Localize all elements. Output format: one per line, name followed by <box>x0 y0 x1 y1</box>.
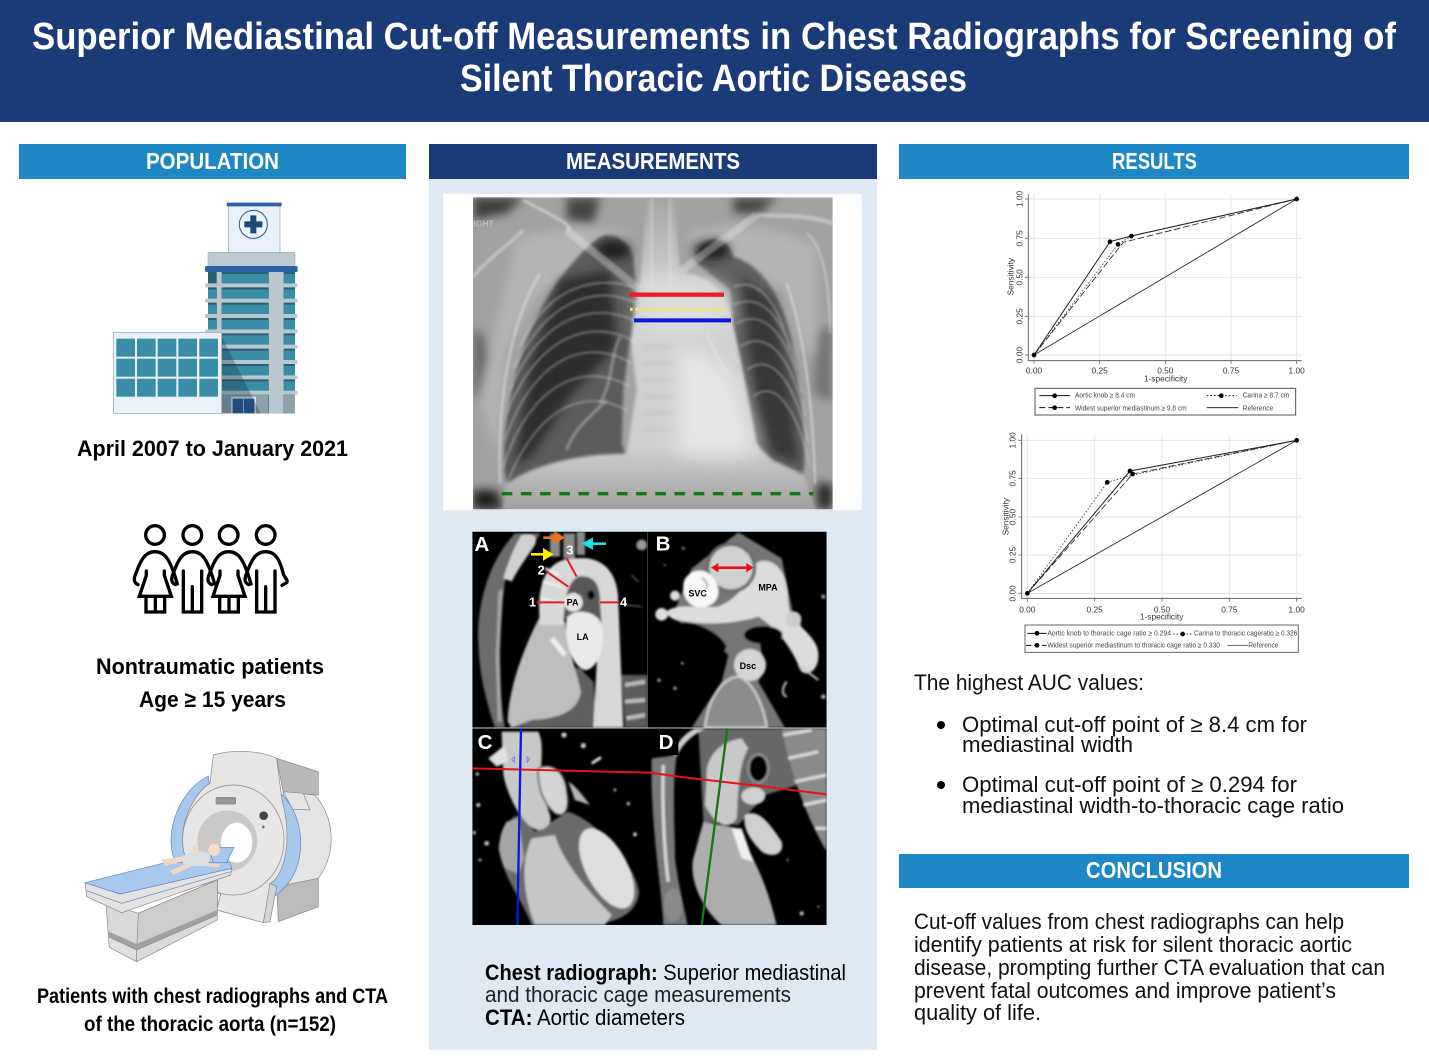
legend: Aortic knob ≥ 8.4 cm <box>1075 393 1135 400</box>
text: conclusion body: disease, prompting further CTA evaluation that can <box>914 955 1385 980</box>
panel A: 1 <box>529 596 536 610</box>
panel B: MPA <box>758 583 778 593</box>
text: conclusion body: quality of life. <box>914 1000 1041 1025</box>
legend <box>1025 625 1298 652</box>
chart: ROC curves for absolute measurements: 1.00 <box>1289 366 1305 376</box>
panel: population <box>19 144 406 1036</box>
chart: ROC curves for ratios: 0.25 <box>1008 547 1018 563</box>
panel C: C <box>478 731 493 754</box>
icon: CT scanner with patient <box>85 751 331 962</box>
chart: ROC curves for ratios: 0.50 <box>1008 509 1018 525</box>
text: measurement description: CTA: Aortic diameters <box>485 1005 685 1030</box>
chart: ROC curves for absolute measurements: 0.75 <box>1014 230 1024 246</box>
chart: ROC curves for ratios: 0.00 <box>1019 604 1036 614</box>
ROC lines <box>1034 199 1297 355</box>
legend: Widest superior mediastinum ≥ 9.8 cm <box>1075 405 1187 412</box>
chart: ROC curves for absolute measurements: 0.25 <box>1092 366 1108 376</box>
chart: ROC curves for absolute measurements: 0.50 <box>1014 269 1024 285</box>
text: study period: April 2007 to January 2021 <box>77 436 348 461</box>
bullet list: cut-off points: Optimal cut-off point of ≥ 8.4 cm for <box>962 712 1307 737</box>
chart: ROC curves for absolute measurements: 1.00 <box>1014 191 1024 207</box>
heading: results <box>899 144 1409 179</box>
bullet list: cut-off points <box>937 712 1344 818</box>
chart: ROC curves for ratios: 0.25 <box>1087 604 1103 614</box>
image: chest radiograph with measurement lines: IGHT <box>473 219 495 229</box>
text: measurement description: Chest radiograph: Superior mediastinal <box>485 960 846 985</box>
icon: hospital <box>113 203 298 413</box>
panel D <box>650 728 827 925</box>
heading: measurements: MEASUREMENTS <box>566 148 740 174</box>
heading: population: POPULATION <box>146 148 279 174</box>
panel B: Dsc <box>740 661 756 671</box>
legend: Reference <box>1243 405 1273 412</box>
bullet list: cut-off points: mediastinal width <box>962 732 1133 757</box>
image: chest radiograph with measurement lines <box>443 194 862 510</box>
chart: ROC curves for absolute measurements: 0.00 <box>1014 347 1024 363</box>
legend: Carina to thoracic cageratio ≥ 0.326 <box>1194 631 1297 638</box>
text: highest AUC values: The highest AUC values: <box>914 670 1144 695</box>
text: conclusion body: identify patients at risk for silent thoracic aortic <box>914 932 1352 957</box>
heading: population <box>19 144 406 179</box>
panel B: SVC <box>688 589 707 599</box>
chart: ROC curves for ratios: 1-specificity <box>1140 611 1184 621</box>
image: CTA panel A and B <box>472 532 827 728</box>
chart: ROC curves for ratios: 0.50 <box>1154 604 1170 614</box>
chart: ROC curves for absolute measurements: 0.50 <box>1157 366 1174 376</box>
legend: Aortic knob to thoracic cage ratio ≥ 0.294 <box>1047 631 1171 638</box>
panel A: 4 <box>620 596 627 610</box>
text: inclusion criteria: Nontraumatic patients <box>96 654 324 679</box>
panel D: D <box>659 731 674 754</box>
chart: ROC curves for ratios: Sensitivity <box>1000 497 1010 535</box>
heading: conclusion <box>899 854 1409 888</box>
title banner <box>0 0 1429 122</box>
heading: measurements <box>429 144 877 179</box>
panel B <box>648 532 827 728</box>
text: cohort: Patients with chest radiographs and CTA <box>37 985 388 1008</box>
text: cohort: of the thoracic aorta (n=152) <box>84 1013 336 1036</box>
legend <box>1035 388 1296 415</box>
chart: ROC curves for absolute measurements: Sensitivity <box>1005 257 1015 295</box>
panel: results <box>899 144 1409 818</box>
text: inclusion criteria: Age ≥ 15 years <box>139 687 286 712</box>
panel A: 2 <box>538 563 545 577</box>
panel A: 3 <box>566 543 573 557</box>
heading: conclusion: CONCLUSION <box>1086 857 1222 883</box>
chart: ROC curves for absolute measurements: 1-specificity <box>1144 374 1188 384</box>
icon: group of people <box>134 526 287 612</box>
heading: results: RESULTS <box>1112 148 1197 174</box>
chart: ROC curves for absolute measurements: 0.75 <box>1223 366 1239 376</box>
text: conclusion body: Cut-off values from chest radiographs can help <box>914 909 1344 934</box>
chart: ROC curves for ratios: 0.00 <box>1008 585 1018 601</box>
panel A: A <box>474 533 489 556</box>
bullet list: cut-off points: mediastinal width-to-thoracic cage ratio <box>962 793 1344 818</box>
panel A <box>472 532 648 728</box>
ROC lines <box>1027 440 1297 593</box>
panel: measurements <box>429 144 877 1050</box>
text: cohort <box>37 985 388 1036</box>
chart: ROC curves for absolute measurements <box>1005 191 1305 415</box>
legend: Widest superior mediastinum to thoracic cage ratio ≥ 0.330 <box>1047 642 1220 649</box>
text: conclusion body: prevent fatal outcomes and improve patient’s <box>914 978 1336 1003</box>
legend: Carina ≥ 8.7 cm <box>1243 393 1290 400</box>
text: inclusion criteria <box>96 654 324 712</box>
text: conclusion body <box>914 909 1385 1025</box>
chart: ROC curves for ratios: 1.00 <box>1008 432 1018 448</box>
panel: conclusion <box>899 854 1409 1025</box>
bullet list: cut-off points: Optimal cut-off point of ≥ 0.294 for <box>962 772 1297 797</box>
chart: ROC curves for ratios <box>1000 432 1305 652</box>
panel A: PA <box>567 598 579 608</box>
chart: ROC curves for absolute measurements: 0.00 <box>1026 366 1042 376</box>
panel B: B <box>656 532 671 555</box>
panel C <box>472 728 650 925</box>
chart: ROC curves for absolute measurements: 0.25 <box>1014 308 1024 324</box>
panel A: LA <box>577 632 589 642</box>
chart: ROC curves for ratios: 0.75 <box>1221 604 1238 614</box>
image: CTA panel C and D <box>472 728 827 925</box>
chart: ROC curves for ratios: 0.75 <box>1008 470 1018 486</box>
text: measurement description <box>485 960 846 1030</box>
text: measurement description: and thoracic cage measurements <box>485 982 791 1007</box>
chart: ROC curves for ratios: 1.00 <box>1289 604 1305 614</box>
title banner: Silent Thoracic Aortic Diseases <box>460 58 967 100</box>
legend: Reference <box>1248 642 1278 649</box>
